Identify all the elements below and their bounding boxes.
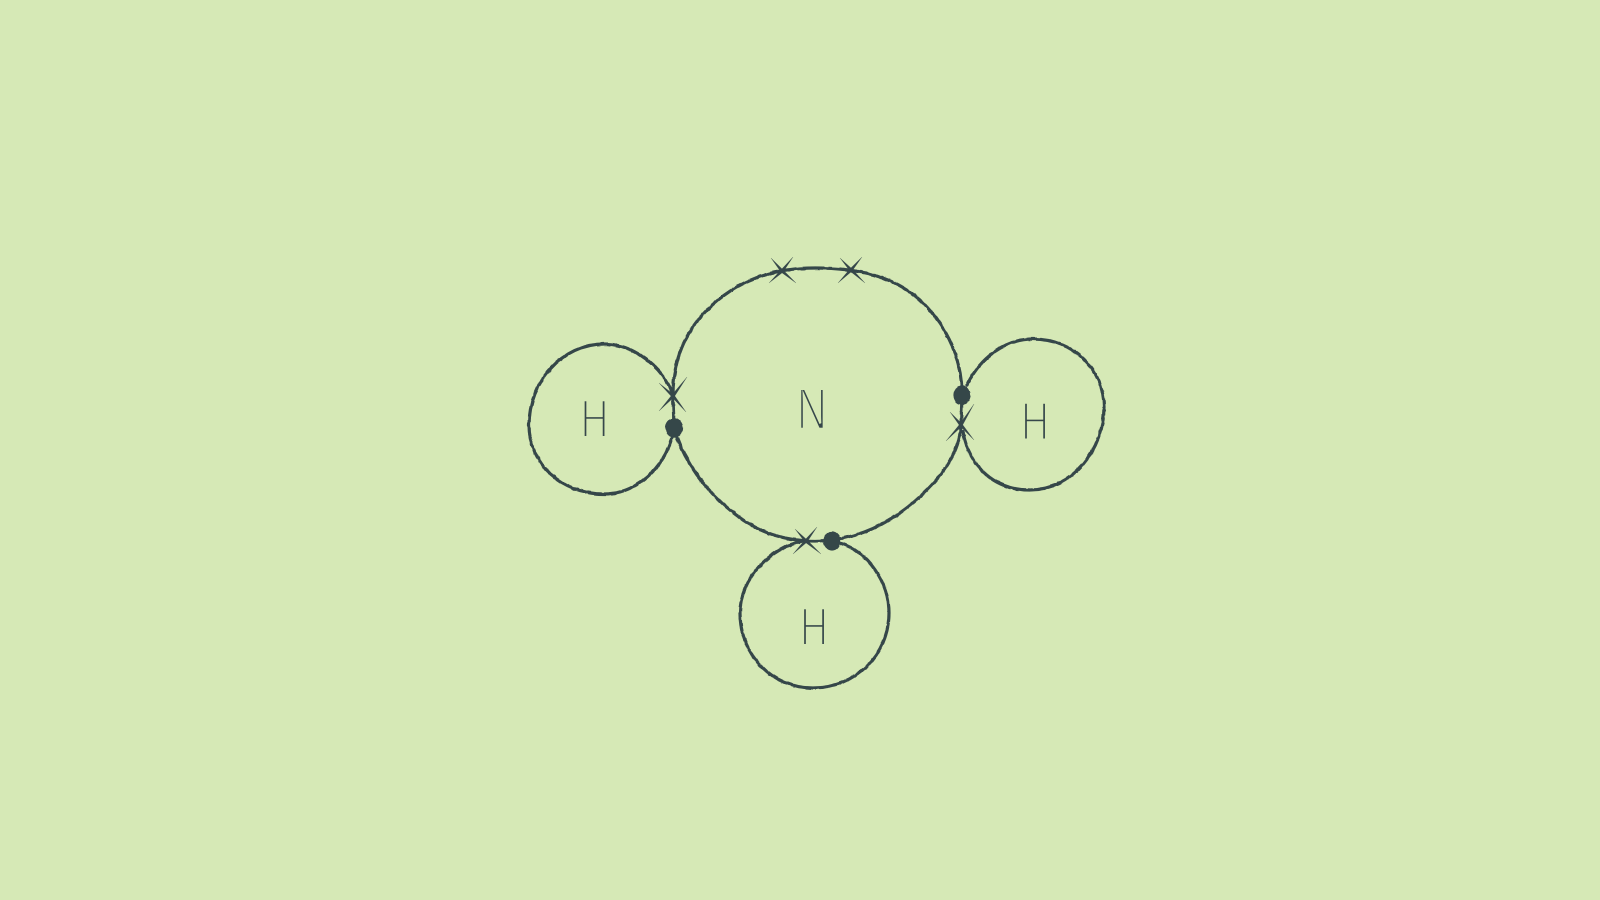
label: bottom hydrogen: H [800, 596, 828, 656]
electron cross: right bond [946, 404, 974, 441]
electron cross: top right lone pair [838, 257, 865, 283]
label: right hydrogen: H [1021, 390, 1049, 451]
electron cross: top left lone pair [769, 257, 796, 283]
electron cross: bottom bond [793, 527, 821, 554]
electron dot: left hydrogen [665, 418, 683, 438]
left hydrogen atom shell [529, 344, 672, 494]
bottom hydrogen atom shell [740, 541, 889, 688]
right hydrogen atom shell [963, 339, 1104, 490]
label: left hydrogen: H [580, 388, 609, 448]
electron cross: left bond [659, 377, 687, 412]
electron dot: right hydrogen [953, 385, 971, 405]
electron dot: bottom hydrogen [823, 531, 841, 551]
nitrogen atom shell [673, 268, 962, 541]
label: nitrogen: N [797, 376, 827, 442]
